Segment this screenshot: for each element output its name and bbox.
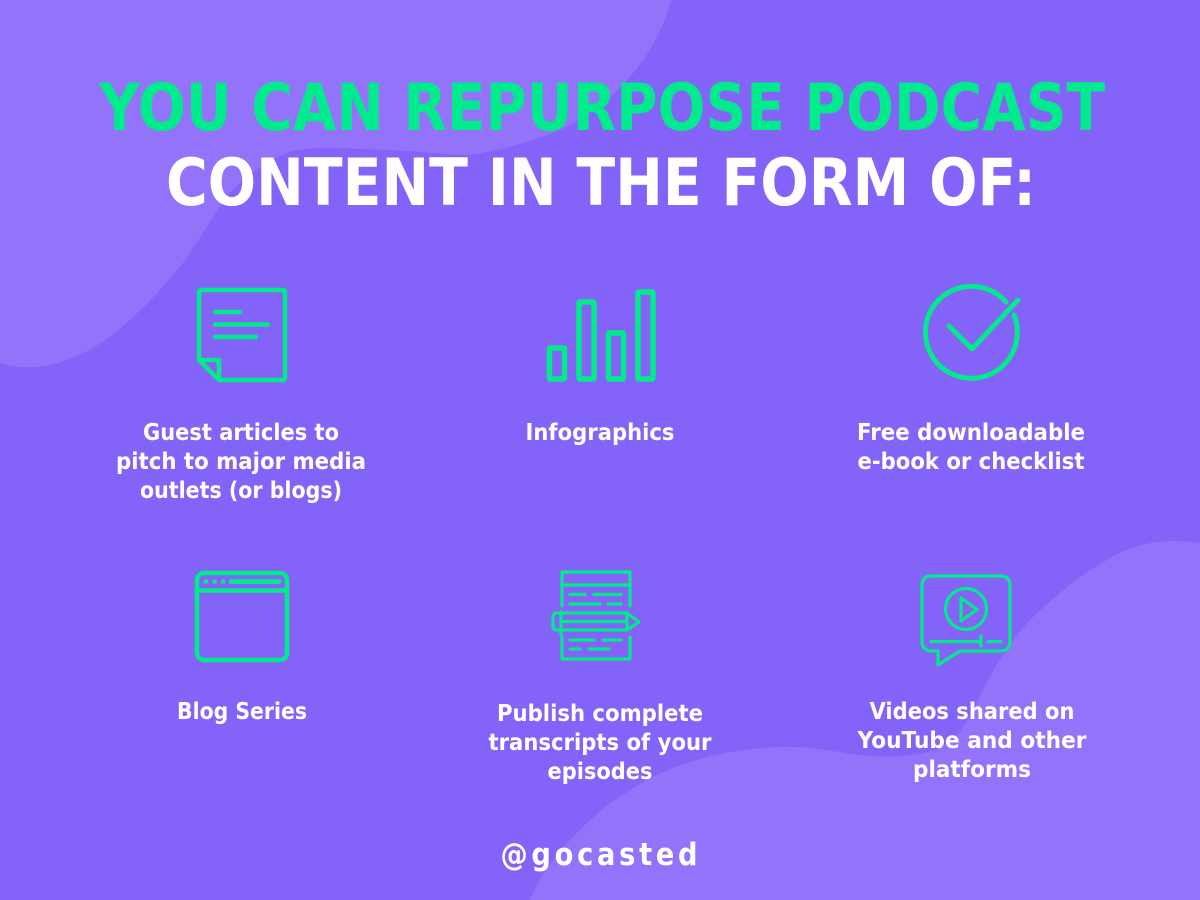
- text: publish transcripts: [488, 699, 712, 785]
- text: blog series: Blog Series: [177, 697, 307, 725]
- text: videos shared: YouTube and other: [857, 726, 1087, 754]
- icon: check circle: [925, 286, 1018, 378]
- text: videos shared: Videos shared on: [870, 697, 1074, 725]
- text: free downloadable: Free downloadable: [857, 418, 1085, 446]
- icon: bar chart: [550, 292, 653, 379]
- text: guest articles: pitch to major media: [116, 447, 366, 475]
- icon: transcript with pencil: [553, 572, 639, 659]
- footer handle: @gocasted: [500, 836, 698, 872]
- text: publish transcripts: transcripts of your: [488, 728, 712, 756]
- text: guest articles: Guest articles to: [143, 418, 339, 446]
- text: videos shared: [857, 697, 1087, 783]
- text: guest articles: outlets (or blogs): [140, 476, 342, 504]
- icon: video speech bubble: [922, 576, 1010, 665]
- text: videos shared: platforms: [913, 755, 1031, 783]
- background blob: top left: [0, 0, 671, 367]
- title: [98, 71, 1105, 221]
- text: guest articles: [116, 418, 366, 504]
- title: CONTENT IN THE FORM OF:: [166, 146, 1036, 221]
- text: free downloadable: [857, 418, 1085, 475]
- background blob: bottom right: [530, 541, 1200, 900]
- text: publish transcripts: Publish complete: [497, 699, 703, 727]
- icon: browser window: [197, 573, 287, 660]
- text: free downloadable: e-book or checklist: [858, 447, 1084, 475]
- text: publish transcripts: episodes: [548, 757, 652, 785]
- text: infographics: Infographics: [526, 418, 674, 446]
- icon: document note: [199, 290, 285, 380]
